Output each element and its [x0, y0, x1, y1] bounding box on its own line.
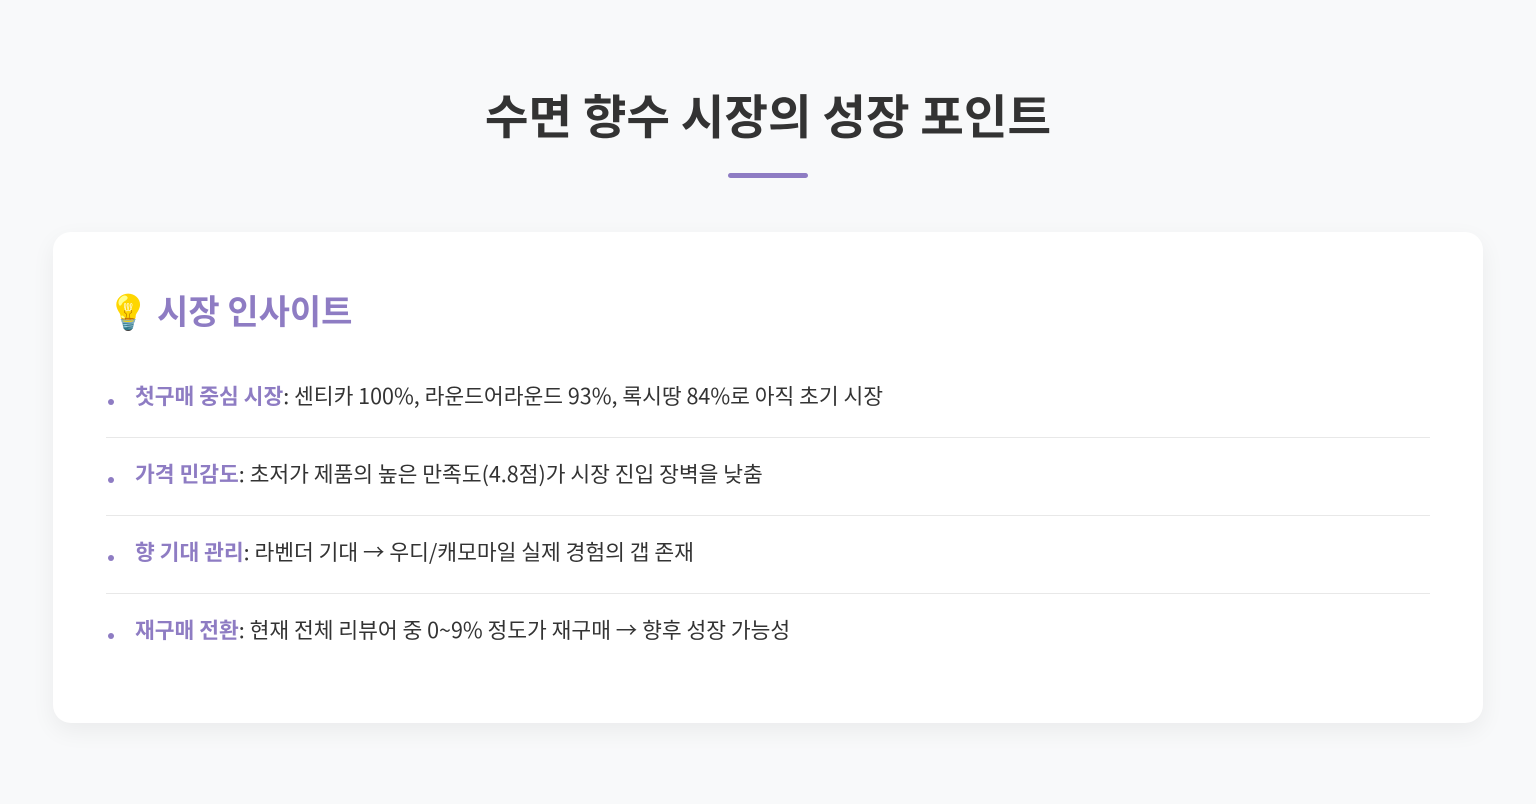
title: 수면 향수 시장의 성장 포인트 [485, 79, 1051, 148]
item 2: 가격 민감도: 초저가 제품의 높은 만족도(4.8점)가 시장 진입 장벽을 낮춤 [135, 458, 763, 489]
item 1 [106, 380, 1430, 438]
heading: 💡 시장 인사이트 [107, 285, 352, 334]
item 3: 향 기대 관리: 라벤더 기대 → 우디/캐모마일 실제 경험의 갭 존재 [135, 536, 694, 567]
item 1: 첫구매 중심 시장: 센티카 100%, 라운드어라운드 93%, 록시땅 84%로 아직 초기 시장 [135, 380, 883, 411]
item 2 [106, 458, 1430, 516]
panel: market insight [53, 232, 1483, 723]
title underline [728, 173, 808, 178]
item 3 [106, 536, 1430, 594]
item 4: 재구매 전환: 현재 전체 리뷰어 중 0~9% 정도가 재구매 → 향후 성장 가능성 [135, 614, 790, 645]
